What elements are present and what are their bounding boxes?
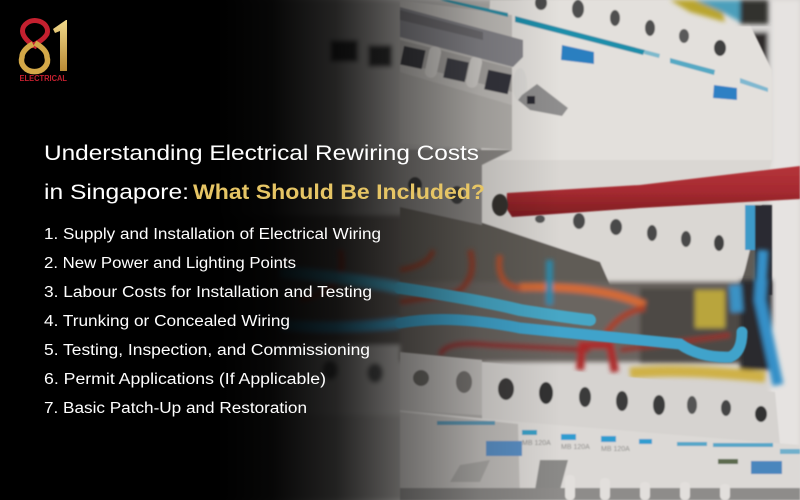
logo figure 8 xyxy=(22,21,48,72)
list of rewiring cost items: 5. Testing, Inspection, and Commissioning xyxy=(44,342,370,359)
list of rewiring cost items: 1. Supply and Installation of Electrical Wiring xyxy=(44,226,381,243)
left extension of board under the fade xyxy=(200,0,520,500)
upper breaker row xyxy=(400,0,772,170)
bottom breaker labels row: MB 120A xyxy=(561,444,590,451)
switch toggles xyxy=(400,40,512,92)
bottom breaker labels row: MB 120A xyxy=(601,446,630,453)
title: What Should Be Included? xyxy=(193,181,485,204)
logo wordmark: ELECTRICAL xyxy=(20,74,67,83)
blue strips xyxy=(440,0,508,17)
yellow cable xyxy=(630,371,765,377)
right blue wires xyxy=(760,250,778,385)
terminal holes upper xyxy=(535,0,547,10)
list of rewiring cost items: 7. Basic Patch-Up and Restoration xyxy=(44,400,307,417)
bottom breaker labels row xyxy=(400,410,800,500)
title: in Singapore: xyxy=(44,181,189,204)
blue wires xyxy=(400,288,742,357)
red-brown wires xyxy=(400,250,433,270)
title xyxy=(44,142,485,204)
list of rewiring cost items: 4. Trunking or Concealed Wiring xyxy=(44,313,290,330)
logo figure 1 xyxy=(53,20,67,71)
grey lever xyxy=(513,68,527,102)
red test probe xyxy=(492,166,800,217)
lower terminal row xyxy=(400,352,780,445)
title: Understanding Electrical Rewiring Costs xyxy=(44,142,479,165)
grey upper housing xyxy=(400,7,523,67)
bottom breaker labels row: MB 120A xyxy=(522,440,551,447)
list of rewiring cost items: 3. Labour Costs for Installation and Testing xyxy=(44,284,372,301)
second terminal row xyxy=(400,150,772,295)
list of rewiring cost items xyxy=(44,226,381,417)
wiring cavity xyxy=(400,250,778,385)
colored wires at top right xyxy=(670,0,768,24)
right wall xyxy=(770,0,800,500)
list of rewiring cost items: 6. Permit Applications (If Applicable) xyxy=(44,371,326,388)
logo: 81 Electrical xyxy=(20,20,67,83)
blue switches xyxy=(561,45,594,64)
list of rewiring cost items: 2. New Power and Lighting Points xyxy=(44,255,296,272)
